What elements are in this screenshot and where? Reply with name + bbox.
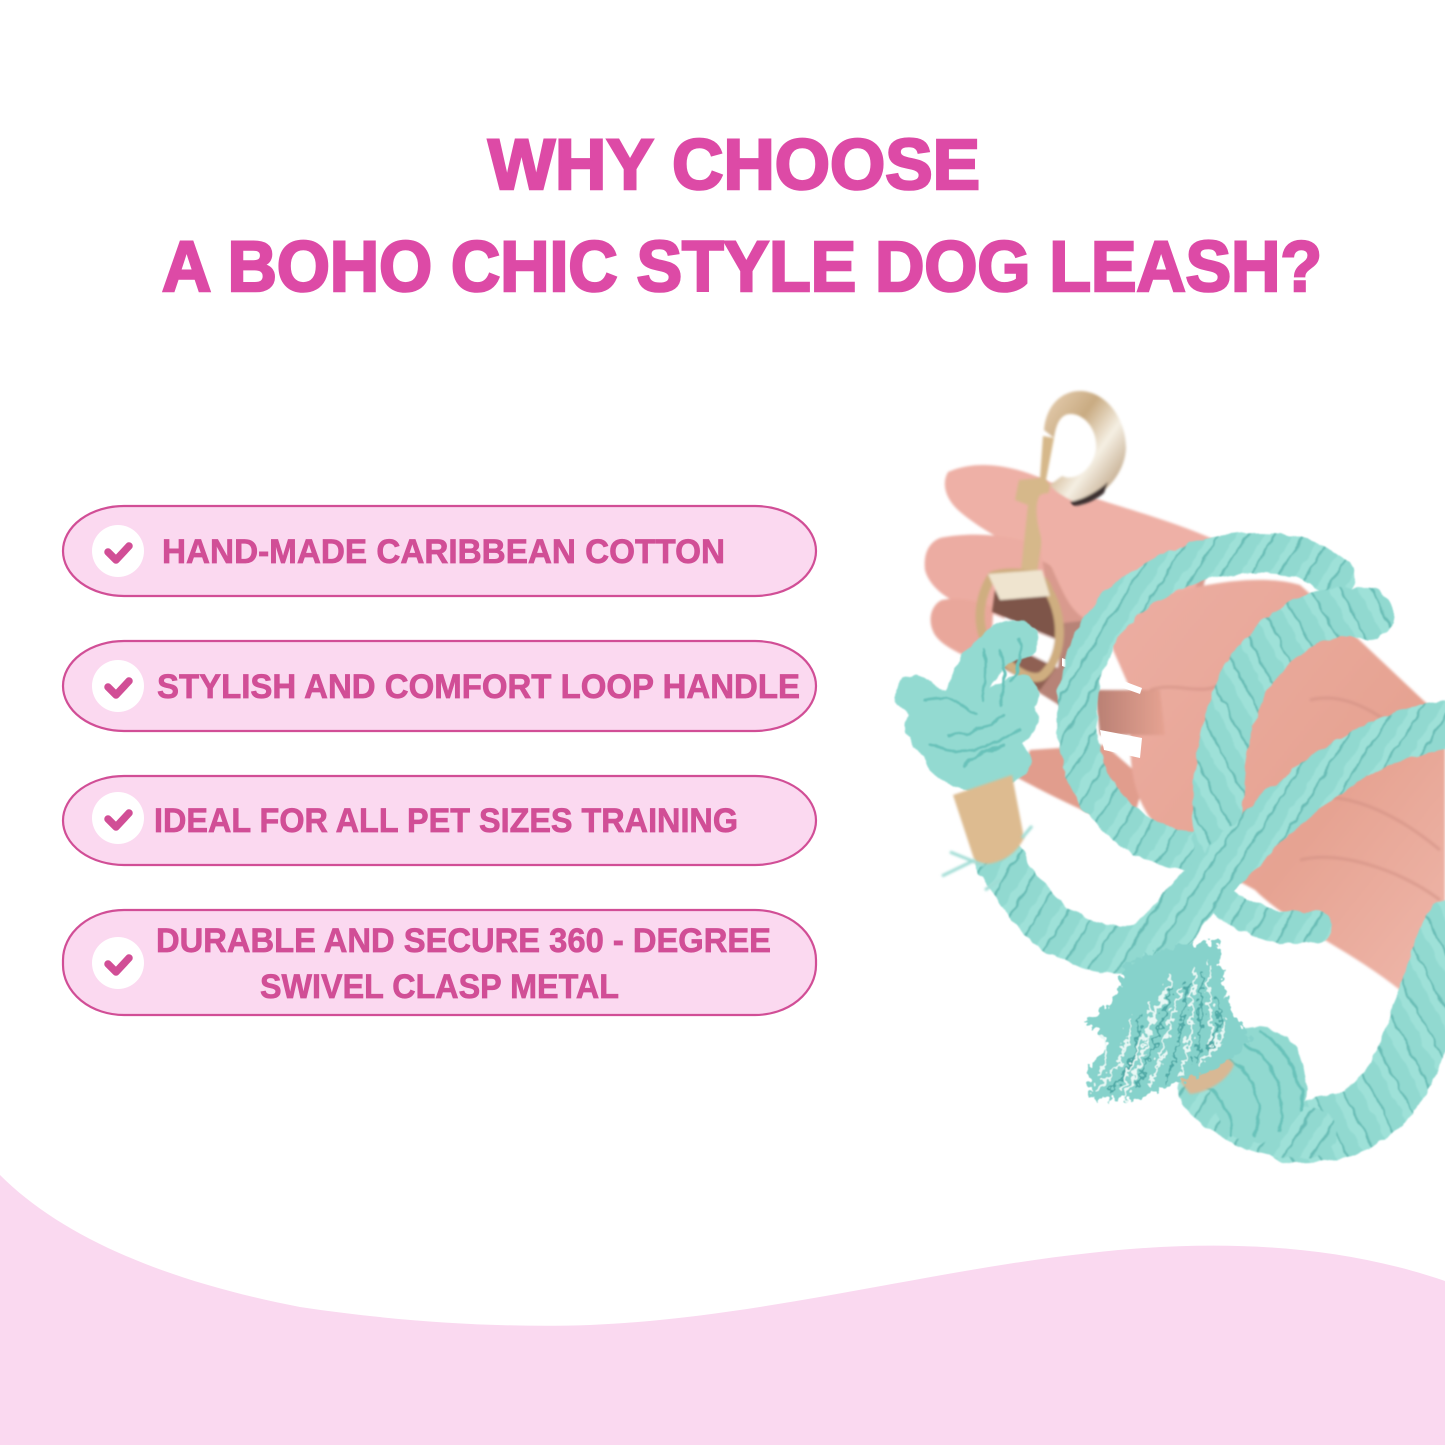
tassel: frayed rope end <box>1082 942 1252 1100</box>
metal swivel clasp <box>980 391 1126 690</box>
thumb <box>1037 493 1150 625</box>
rope: strand across palm <box>1217 612 1368 870</box>
label 2: STYLISH AND COMFORT LOOP HANDLE <box>157 668 800 706</box>
feature: loop handle <box>63 641 816 731</box>
background wave <box>0 1175 1445 1445</box>
label 4: SWIVEL CLASP METAL <box>260 968 619 1006</box>
tan wrap below knot <box>953 775 1024 864</box>
photo: hand holding rope leash <box>915 391 1445 1143</box>
white gap in rope crossing <box>1205 927 1225 943</box>
feature: hand-made cotton <box>63 506 816 596</box>
frayed strands at wrap <box>942 826 1032 890</box>
white gaps in hand <box>1062 658 1142 758</box>
feature: swivel clasp <box>63 910 816 1015</box>
hand <box>925 465 1445 1010</box>
icon: check 2 <box>92 660 144 712</box>
panel: feature list <box>63 506 816 1015</box>
icon: check 3 <box>92 792 144 844</box>
label 3: IDEAL FOR ALL PET SIZES TRAINING <box>154 802 738 840</box>
rope: lower knot <box>1205 1027 1306 1143</box>
rope: long strand to knot <box>1000 722 1445 955</box>
rope end cap, lower <box>1178 1052 1234 1094</box>
rope: upper knot <box>915 640 1020 771</box>
title line 1: WHY CHOOSE <box>488 126 980 205</box>
label 4: DURABLE AND SECURE 360 - DEGREE <box>156 922 771 960</box>
icon: check 4 <box>92 937 144 989</box>
label 4 <box>156 922 771 1006</box>
icon: check 1 <box>92 525 144 577</box>
feature: all pet sizes <box>63 776 816 865</box>
label 1: HAND-MADE CARIBBEAN COTTON <box>162 533 725 571</box>
title line 2: A BOHO CHIC STYLE DOG LEASH? <box>162 228 1322 307</box>
rope: loop around hand <box>1077 552 1335 852</box>
rope: bottom wrap <box>1215 893 1316 928</box>
rope: right strand and lower loop <box>1205 930 1445 1132</box>
title <box>162 126 1322 307</box>
